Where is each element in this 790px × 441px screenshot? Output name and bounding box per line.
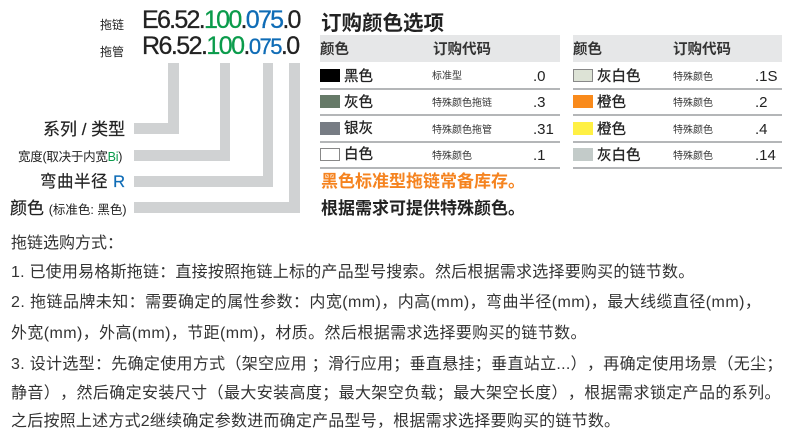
row: black: 标准型 (432, 71, 462, 82)
label: colour: 颜色 (标准色: 黑色) (10, 199, 127, 218)
row: grey: 特殊颜色拖链 (432, 98, 492, 109)
row: grey (320, 94, 546, 111)
row: black: .0 (533, 68, 546, 85)
row: off white S: 灰白色 (597, 69, 640, 85)
row: black: 黑色 (344, 69, 373, 85)
selection guide text: 外宽(mm)，外高(mm)，节距(mm)，材质。然后根据需求选择要购买的链节数。 (11, 325, 587, 342)
row: black (320, 68, 546, 85)
row: grey: .3 (533, 94, 546, 111)
label: series / type: 系列 / 类型 (43, 120, 125, 139)
panel: colour table right: 颜色 (573, 42, 602, 58)
panel: colour table left: 订购代码 (433, 42, 491, 58)
part code E: E6.52.100.075.0 (142, 6, 300, 34)
selection guide text (11, 234, 783, 430)
selection guide text: 3. 设计选型：先确定使用方式（架空应用 ；滑行应用；垂直悬挂；垂直站立...），再确定使用场景（无尘； (11, 356, 783, 373)
panel: colour table right: 订购代码 (673, 42, 731, 58)
label: width: 宽度(取决于内宽Bi) (18, 150, 122, 164)
row: off white 14: 灰白色 (597, 148, 640, 164)
label: bend radius: 弯曲半径 R (40, 173, 126, 191)
row: off white S: 特殊颜色 (673, 72, 713, 83)
row: silver grey (320, 120, 554, 138)
row: orange: 特殊颜色 (673, 98, 713, 109)
row: white: 特殊颜色 (432, 151, 472, 162)
colour options title: 订购颜色选项 (321, 12, 444, 35)
panel: colour table left: 颜色 (320, 42, 349, 58)
part code R: R6.52.100.075.0 (142, 32, 299, 60)
connector: colour (134, 63, 300, 213)
row: off white 14: .14 (755, 147, 776, 164)
connector: bend radius (134, 63, 273, 187)
stock note orange: 黑色标准型拖链常备库存。 (321, 172, 525, 191)
label: drag tube: 拖管 (100, 45, 124, 59)
row: off white S (573, 68, 778, 85)
row: white (320, 146, 546, 164)
panel: colour table left (320, 35, 560, 169)
selection guide text: 拖链选购方式： (11, 235, 123, 252)
row: orange: .2 (755, 94, 768, 111)
row: yellow: .4 (755, 121, 768, 138)
row: orange: 橙色 (597, 95, 626, 111)
table header (320, 35, 560, 62)
selection guide text: 之后按照上述方式2继续确定参数进而确定产品型号，根据需求选择要购买的链节数。 (11, 413, 620, 430)
row: silver grey: 银灰 (344, 121, 373, 137)
table header (573, 35, 782, 62)
row: off white 14: 特殊颜色 (673, 151, 713, 162)
row: silver grey: 特殊颜色拖管 (432, 125, 492, 136)
row: white: .1 (533, 147, 546, 164)
row: white: 白色 (344, 147, 373, 163)
special colour note: 根据需求可提供特殊颜色。 (321, 199, 525, 218)
row: grey: 灰色 (344, 95, 373, 111)
part number diagram (10, 6, 301, 218)
row: orange (573, 94, 768, 111)
row: silver grey: .31 (533, 121, 554, 138)
row: off white S: .1S (755, 68, 778, 85)
row: yellow: 特殊颜色 (673, 125, 713, 136)
label: drag chain: 拖链 (100, 18, 124, 32)
row: yellow: 橙色 (597, 122, 626, 138)
panel: colour table right (573, 35, 782, 169)
connector: series (134, 63, 179, 134)
selection guide text: 1. 已使用易格斯拖链：直接按照拖链上标的产品型号搜索。然后根据需求选择要购买的链节数。 (11, 264, 694, 281)
selection guide text: 静音），然后确定安装尺寸（最大安装高度；最大架空负载；最大架空长度），根据需求锁定产品的系列。 (11, 385, 781, 402)
selection guide text: 2. 拖链品牌未知：需要确定的属性参数：内宽(mm)，内高(mm)，弯曲半径(mm)，最大线缆直径(mm)， (11, 294, 761, 311)
row: yellow (573, 121, 768, 138)
connector: width (134, 63, 230, 161)
row: off white 14 (573, 147, 776, 164)
